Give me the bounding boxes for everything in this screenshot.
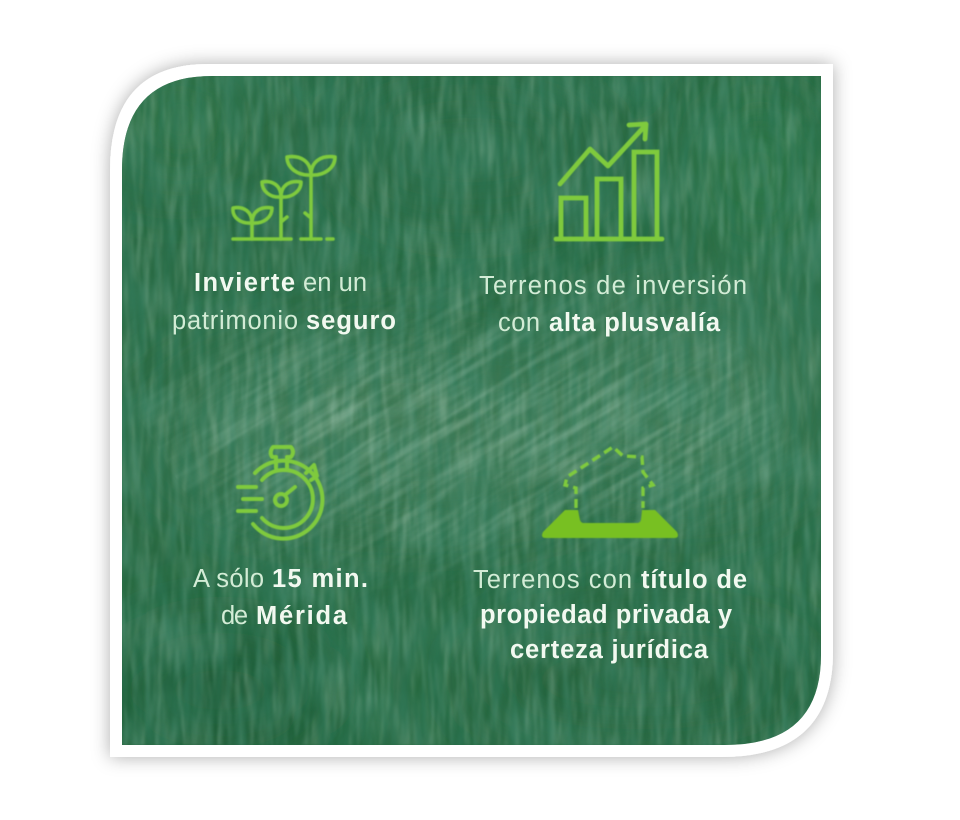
text: invierte en un patrimonio seguro: seguro (306, 307, 396, 335)
text: a solo 15 min de merida: A sólo (193, 565, 264, 593)
icon: rising bar chart (556, 124, 662, 239)
text: terrenos con titulo de propiedad privada y certeza juridica: Terrenos con (473, 566, 632, 594)
icon: house on land plot (542, 447, 678, 538)
block: a solo 15 min de merida (193, 447, 368, 630)
text: a solo 15 min de merida: Mérida (256, 602, 348, 630)
text: terrenos con titulo de propiedad privada y certeza juridica: propiedad privada y (480, 601, 733, 629)
text: terrenos de inversion con alta plusvalia: con (498, 309, 540, 337)
text: terrenos con titulo de propiedad privada y certeza juridica: certeza jurídica (510, 636, 709, 664)
text: a solo 15 min de merida: 15 min. (272, 565, 368, 593)
panel: grass background (122, 76, 821, 745)
white rounded frame (110, 64, 833, 757)
text: terrenos de inversion con alta plusvalia: alta plusvalía (549, 309, 721, 337)
text: terrenos con titulo de propiedad privada y certeza juridica: título de (641, 566, 747, 594)
text: invierte en un patrimonio seguro: en un (303, 269, 367, 297)
block: terrenos de inversion (479, 124, 747, 337)
block: titulo de propiedad privada (473, 447, 747, 664)
infographic canvas (99, 53, 844, 768)
text: invierte en un patrimonio seguro: Invierte (194, 269, 295, 297)
icon: stopwatch (238, 447, 322, 539)
text: a solo 15 min de merida: de (221, 602, 248, 630)
text: terrenos de inversion con alta plusvalia: Terrenos de inversión (479, 272, 747, 300)
icon: growing plants (233, 157, 335, 239)
block: invierte en un patrimonio seguro (172, 157, 396, 335)
text: invierte en un patrimonio seguro: patrimonio (172, 307, 298, 335)
